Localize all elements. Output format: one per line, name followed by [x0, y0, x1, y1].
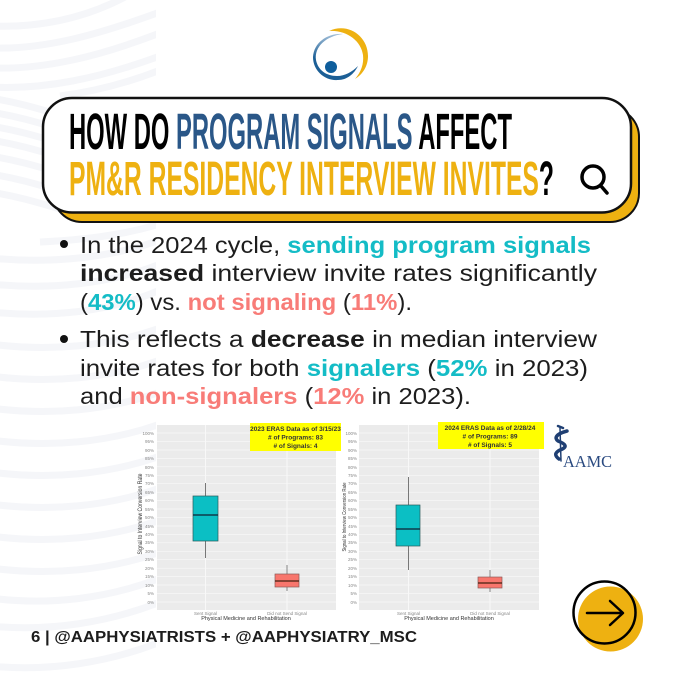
- y axis ticks: 50%: [348, 515, 357, 520]
- y axis ticks: 20%: [145, 566, 154, 571]
- box: sent signal: [396, 477, 420, 570]
- y axis ticks: [142, 431, 154, 605]
- next arrow button: [574, 582, 643, 652]
- x axis title: Physical Medicine and Rehabilitation: [404, 616, 494, 622]
- chart: 2024 box plot: [342, 422, 544, 622]
- box: did not send signal: [478, 570, 502, 592]
- y axis ticks: 70%: [145, 481, 154, 486]
- icon: magnifying glass: [582, 166, 607, 193]
- chart: 2024 box plot: Did not Send Signal: [470, 611, 510, 616]
- y axis ticks: 25%: [348, 557, 357, 562]
- footer handle text: 6 | @AAPHYSIATRISTS + @AAPHYSIATRY_MSC: [31, 629, 417, 646]
- y axis ticks: 65%: [348, 490, 357, 495]
- y axis ticks: 35%: [348, 540, 357, 545]
- yellow data label: [250, 423, 341, 451]
- x labels: Sent Signal: [194, 611, 217, 616]
- line 3: (43%) vs. not signaling (11%).: [80, 289, 412, 315]
- y axis ticks: 80%: [145, 465, 154, 470]
- y axis ticks: 0%: [147, 600, 154, 605]
- yellow data label: 2023 ERAS Data as of 3/15/23: [250, 426, 341, 433]
- title box panel: [43, 98, 631, 212]
- icon: staff and serpent: [556, 426, 567, 461]
- y axis title: Signal to Interview Conversion Rate: [138, 473, 144, 554]
- y axis ticks: 75%: [145, 473, 154, 478]
- y axis ticks: [345, 431, 357, 605]
- y axis ticks: 30%: [145, 549, 154, 554]
- AAMC text: AAMC: [563, 452, 612, 471]
- title line 1: HOW DO PROGRAM SIGNALS AFFECT: [69, 103, 512, 160]
- icon: arrow: [587, 601, 623, 625]
- y axis ticks: 100%: [142, 431, 154, 436]
- y axis ticks: 95%: [145, 439, 154, 444]
- yellow data label: 2024 ERAS Data as of 2/28/24: [445, 425, 536, 432]
- y axis ticks: 90%: [145, 448, 154, 453]
- y axis ticks: 60%: [348, 498, 357, 503]
- y axis title: Signal to Interview Conversion Rate: [342, 482, 348, 552]
- box: sent signal: [193, 483, 218, 558]
- y axis ticks: 85%: [145, 456, 154, 461]
- bullet dot: [60, 240, 68, 248]
- line 1: This reflects a decrease in median interview: [80, 326, 598, 352]
- blue crescent: [313, 34, 358, 80]
- AAMC logo: [556, 426, 612, 471]
- line 1: In the 2024 cycle, sending program signals: [80, 232, 591, 258]
- y axis ticks: 45%: [145, 524, 154, 529]
- y axis ticks: 70%: [348, 481, 357, 486]
- bullet list 1: [60, 232, 597, 315]
- yellow data label: # of Programs: 83: [268, 434, 323, 442]
- yellow data label: # of Signals: 4: [273, 443, 318, 450]
- box: did not send signal: [275, 565, 299, 591]
- chart: 2023 box plot: [138, 423, 341, 622]
- y axis ticks: 95%: [348, 439, 357, 444]
- y axis ticks: 5%: [350, 591, 357, 596]
- y axis ticks: 55%: [348, 507, 357, 512]
- y axis ticks: 60%: [145, 498, 154, 503]
- y axis ticks: 10%: [145, 583, 154, 588]
- bullet dot: [60, 335, 68, 343]
- y axis ticks: 5%: [147, 591, 154, 596]
- y axis ticks: 90%: [348, 448, 357, 453]
- y axis ticks: 20%: [348, 566, 357, 571]
- y axis ticks: 40%: [348, 532, 357, 537]
- x labels: Sent Signal: [397, 611, 420, 616]
- yellow data label: # of Signals: 5: [468, 442, 512, 449]
- y axis ticks: 0%: [350, 600, 357, 605]
- y axis ticks: 80%: [348, 465, 357, 470]
- y axis ticks: 65%: [145, 490, 154, 495]
- title box shadow: [53, 108, 639, 222]
- plot background: [359, 425, 539, 610]
- y axis ticks: 35%: [145, 540, 154, 545]
- line 2: invite rates for both signalers (52% in 2023): [80, 355, 588, 381]
- x axis title: Physical Medicine and Rehabilitation: [201, 616, 291, 622]
- bullet list 2: [60, 326, 598, 409]
- line 2: increased interview invite rates significantly: [80, 260, 597, 286]
- line 3: and non-signalers (12% in 2023).: [80, 383, 471, 409]
- blue dot: [325, 61, 337, 73]
- y axis ticks: 45%: [348, 524, 357, 529]
- y axis ticks: 15%: [145, 574, 154, 579]
- y axis ticks: 55%: [145, 507, 154, 512]
- y axis ticks: 25%: [145, 557, 154, 562]
- y axis ticks: 50%: [145, 515, 154, 520]
- y axis ticks: 75%: [348, 473, 357, 478]
- y axis ticks: 100%: [345, 431, 357, 436]
- logo: [313, 28, 368, 80]
- y axis ticks: 85%: [348, 456, 357, 461]
- plot background: [157, 425, 336, 610]
- yellow data label: [438, 422, 544, 449]
- chart: 2023 box plot: Did not Send Signal: [267, 611, 307, 616]
- y axis ticks: 15%: [348, 574, 357, 579]
- y axis ticks: 10%: [348, 583, 357, 588]
- y axis ticks: 40%: [145, 532, 154, 537]
- title box: [43, 98, 639, 222]
- yellow data label: # of Programs: 89: [463, 434, 518, 440]
- yellow crescent: [329, 28, 368, 79]
- y axis ticks: 30%: [348, 549, 357, 554]
